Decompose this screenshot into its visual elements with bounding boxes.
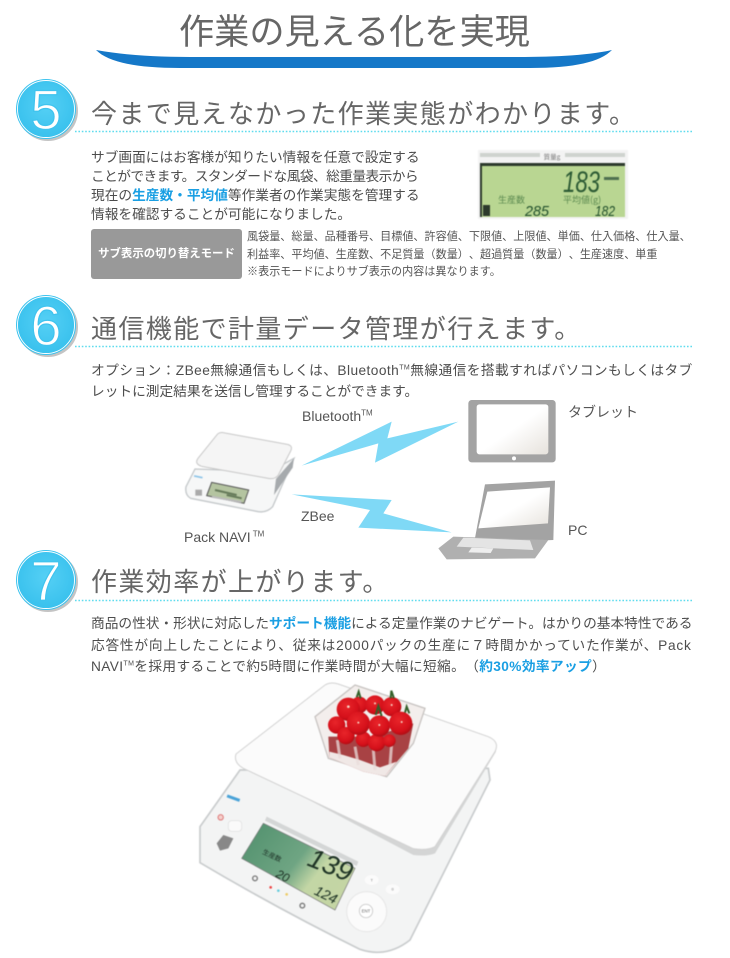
- ZBee label: ZBee: [301, 508, 334, 524]
- section 7 number badge: [16, 549, 78, 612]
- section 6 dotted divider: [75, 346, 692, 348]
- section 5 number badge: [16, 78, 78, 141]
- section 6 number badge: 6: [30, 294, 62, 357]
- sub display mode label: サブ表示の切り替えモード: [98, 248, 235, 260]
- section 5 body text: ことができます。スタンダードな風袋、総重量表示から: [91, 169, 418, 184]
- Pack NAVI label: Pack NAVI TM: [184, 529, 264, 545]
- LCD sub display photo: 平均値(g): [563, 193, 601, 206]
- LCD display: 124: [312, 882, 340, 907]
- communication diagram: [184, 400, 556, 560]
- control panel buttons: [217, 794, 400, 932]
- section 5 body text: [91, 150, 420, 222]
- title underline swoosh: [96, 50, 612, 68]
- sub display mode label: [91, 229, 242, 279]
- control panel buttons: 0: [392, 887, 395, 892]
- scale base: [200, 768, 490, 952]
- section 6 body text: [91, 363, 693, 399]
- section 7 body text: 応答性が向上したことにより、従来は2000パックの生産に７時間かかっていた作業が、Pack: [91, 638, 692, 652]
- section 6 number badge: [16, 294, 78, 357]
- platform side edge: [236, 747, 496, 856]
- sub display mode list: 利益率、平均値、生産数、不足質量（数量）、超過質量（数量）、生産速度、単重: [247, 249, 657, 261]
- LCD sub display photo: 182: [595, 203, 616, 220]
- section 6 body text: レットに測定結果を送信し管理することができます。: [91, 384, 418, 399]
- small scale product image: [184, 432, 296, 513]
- section 5 body text: サブ画面にはお客様が知りたい情報を任意で設定する: [91, 150, 420, 165]
- section 7 body text: 商品の性状・形状に対応したサポート機能による定量作業のナビゲート。はかりの基本特性である: [91, 616, 692, 631]
- LCD sub display photo: [478, 150, 628, 220]
- section 7 dotted divider: [75, 600, 692, 602]
- title: 作業の見える化を実現: [179, 13, 530, 52]
- LCD display: 139: [304, 842, 358, 888]
- section 5 number badge: 5: [30, 78, 62, 141]
- section 7 body text: [91, 616, 692, 674]
- control panel buttons: ENT: [362, 909, 371, 914]
- LCD sub display photo: 183: [563, 166, 600, 199]
- section 5 heading: 今まで見えなかった作業実態がわかります。: [91, 99, 636, 129]
- section 7 heading: 作業効率が上がります。: [91, 567, 390, 597]
- section 7 number badge: 7: [30, 549, 62, 612]
- Bluetooth label: BluetoothTM: [302, 408, 373, 424]
- LCD display: [242, 817, 358, 910]
- sub display mode list: 風袋量、総量、品種番号、目標値、許容値、下限値、上限値、単価、仕入価格、仕入量、: [247, 231, 691, 243]
- section 7 body text: NAVITMを採用することで約5時間に作業時間が大幅に短縮。（約30%効率アップ）: [91, 659, 606, 674]
- PC label: PC: [568, 522, 587, 538]
- section 6 body text: オプション：ZBee無線通信もしくは、BluetoothTM無線通信を搭載すればパソコンもしくはタブ: [91, 363, 693, 378]
- tablet icon: [468, 400, 556, 462]
- tablet label: タブレット: [568, 404, 638, 420]
- section 6 heading: 通信機能で計量データ管理が行えます。: [91, 314, 582, 344]
- large scale product photo with tomatoes: [198, 682, 498, 954]
- sub display note: ※表示モードによりサブ表示の内容は異なります。: [247, 266, 501, 278]
- control panel buttons: T: [370, 877, 373, 882]
- lightning bolt: Bluetooth link: [302, 422, 458, 466]
- LCD display: 20: [273, 866, 292, 885]
- LCD display: 生産数: [261, 846, 284, 864]
- sub display mode list: [247, 230, 691, 261]
- weighing platform: [235, 683, 496, 849]
- section 5 body text: 現在の生産数・平均値等作業者の作業実態を管理する: [91, 188, 420, 203]
- LCD sub display photo: 生産数: [498, 193, 525, 206]
- LCD sub display photo: 質量g: [544, 151, 561, 161]
- section 5 body text: 情報を確認することが可能になりました。: [91, 207, 351, 222]
- LCD sub display photo: 285: [524, 203, 550, 220]
- laptop icon: [438, 480, 555, 560]
- tomato container: [315, 685, 425, 777]
- section 5 dotted divider: [75, 130, 692, 132]
- lightning bolt: ZBee link: [292, 494, 452, 532]
